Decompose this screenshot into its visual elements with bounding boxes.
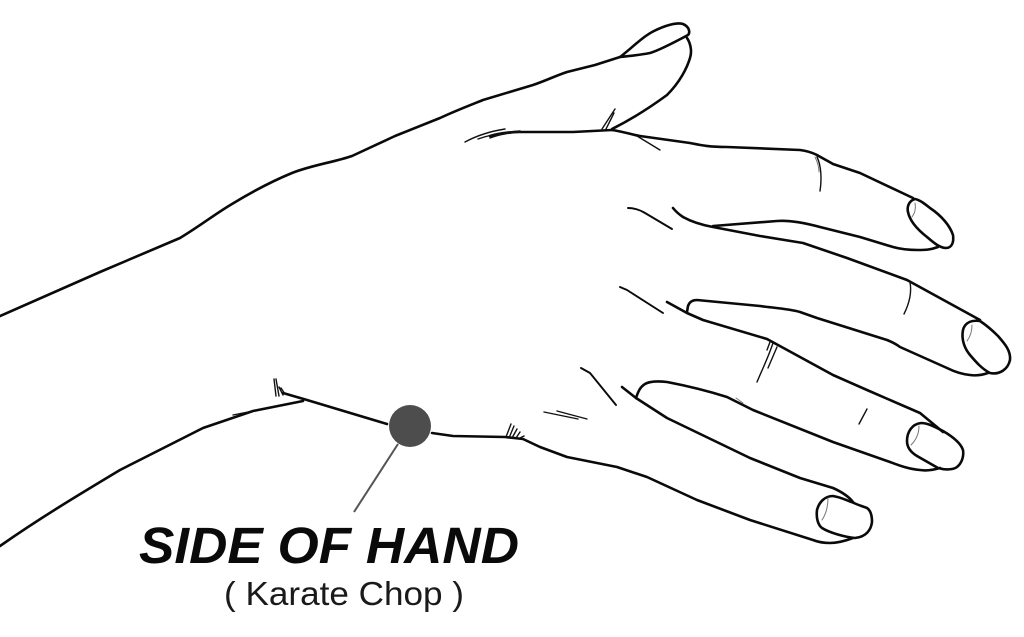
tapping point marker	[389, 405, 431, 447]
hatch at hand side	[506, 424, 524, 438]
thumb base marks	[465, 129, 520, 142]
top of hand and index finger upper edge	[490, 130, 913, 198]
ring finger upper edge	[667, 302, 943, 432]
finger joint creases	[736, 157, 972, 520]
index finger lower edge	[713, 221, 938, 250]
pinky upper edge	[622, 387, 853, 502]
ring finger lower edge	[636, 381, 940, 470]
hatch at wrist	[274, 379, 285, 396]
middle finger lower edge	[687, 300, 988, 375]
thumb nail	[620, 23, 689, 57]
knuckle and palm creases	[274, 109, 672, 438]
pointer line	[354, 444, 398, 512]
middle finger nail and tip	[962, 321, 1010, 373]
forearm lower contour	[0, 401, 303, 546]
ring finger nail and tip	[907, 423, 963, 469]
subheading: karate chop: ( Karate Chop )	[224, 575, 464, 612]
small fold at forearm	[233, 411, 253, 415]
pinky lower edge and side of hand	[432, 433, 853, 543]
middle finger upper edge	[673, 208, 980, 320]
heading: side of hand: SIDE OF HAND	[139, 517, 519, 574]
knuckle creases	[628, 208, 672, 229]
index finger nail	[908, 199, 953, 248]
wrist contour	[283, 393, 387, 424]
pinky nail and tip	[817, 496, 872, 538]
arm upper contour to thumb	[0, 57, 620, 316]
lower palm marks	[544, 411, 587, 419]
thumb side	[612, 38, 691, 129]
